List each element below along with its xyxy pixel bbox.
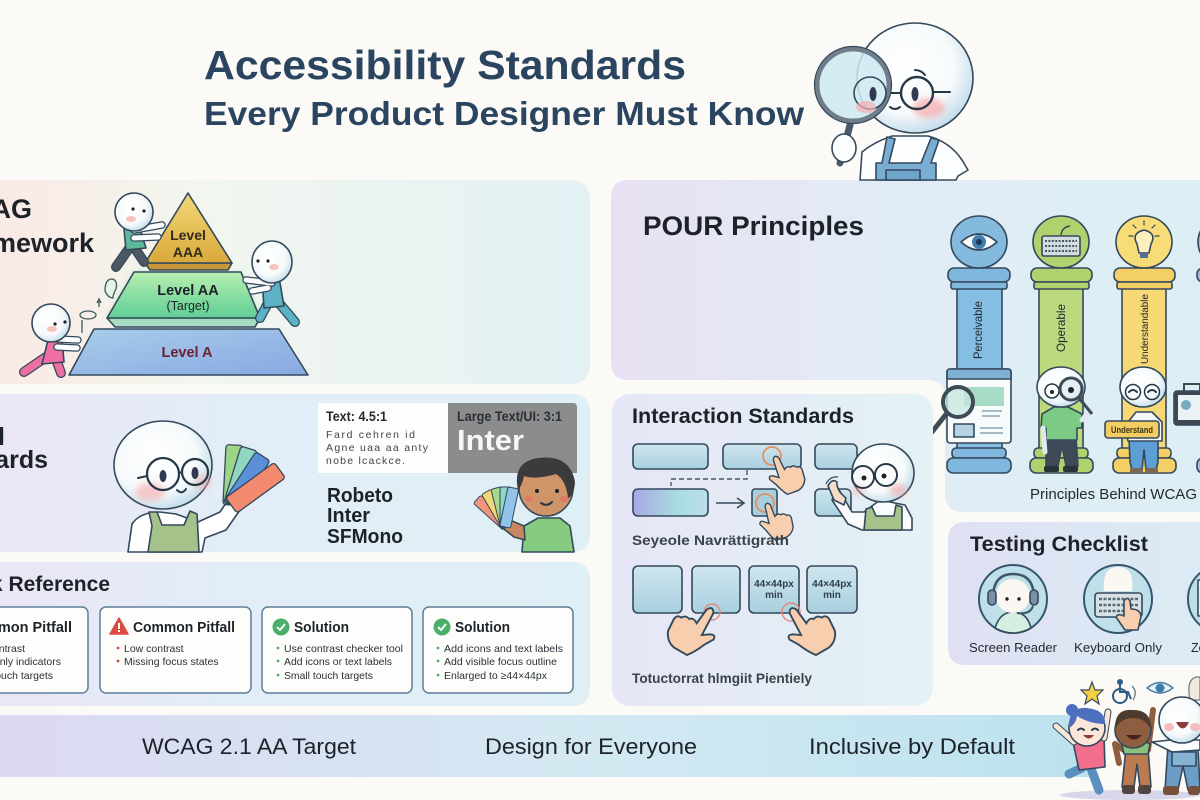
card: solution focus: Add visible focus outline (444, 656, 557, 668)
character: designer with palette fan (114, 421, 285, 552)
celebrating group (1056, 677, 1200, 800)
touch target label: 44×44px (754, 579, 794, 590)
label: Keyboard Only: Keyboard Only (1074, 641, 1163, 655)
label: Level AA Target: (Target) (166, 299, 210, 313)
caption: touch targets: Totuctorrat hlmgiit Pientiely (632, 670, 812, 686)
message: WCAG target: WCAG 2.1 AA Target (142, 734, 356, 759)
card: solution focus: Enlarged to ≥44×44px (444, 670, 548, 682)
card: solution tools: Add icons or text labels (284, 656, 392, 668)
label: Screen Reader: Screen Reader (969, 641, 1057, 655)
message: inclusive by default: Inclusive by Default (809, 734, 1015, 759)
touch target label (754, 579, 794, 601)
touch target label (812, 579, 852, 601)
icon: wheelchair (1113, 680, 1135, 703)
icon: ear and small accessibility marks (80, 279, 116, 333)
label: Level AAA (170, 227, 206, 260)
icon: palette swatch fan (223, 445, 285, 513)
keyboard navigation diagram (633, 444, 857, 543)
character: sign holder (1105, 367, 1166, 473)
character: climber teal (115, 193, 162, 267)
icon: magnifying glass (814, 46, 892, 163)
card: common pitfall: Low contrast (124, 643, 184, 655)
contrast sample card (318, 403, 577, 473)
card: solution focus (423, 607, 573, 693)
icon: screen reader (979, 565, 1047, 633)
pillar label: Perceivable (971, 301, 985, 359)
sign: Understand (1111, 425, 1153, 435)
pillar: Perceivable (947, 216, 1011, 473)
magnifier mascot (814, 23, 973, 180)
icon: keyboard only (1084, 565, 1152, 633)
character: guide pointing (826, 444, 914, 530)
icon: browser window with magnifier (932, 369, 1011, 443)
kid: mascot overalls blue (1152, 697, 1200, 795)
icon: warning triangle (110, 618, 128, 634)
touch target diagram (633, 566, 857, 663)
card: common pitfall: Common Pitfall (133, 620, 235, 636)
card: common pitfall: Missing focus states (124, 656, 219, 668)
sample paragraph: Fard cehren id (326, 429, 415, 441)
label: Level AAA: AAA (173, 244, 203, 260)
footer band (0, 715, 1090, 777)
heading: WCAG Framework (0, 194, 95, 258)
sample paragraph (326, 429, 429, 467)
title (204, 42, 804, 132)
label: Level AA Target: Level AA (157, 283, 219, 299)
card: solution tools (262, 607, 412, 693)
sample paragraph: Agne uaa aa anty (326, 442, 429, 454)
icon: zoom (1188, 565, 1200, 633)
label: Level A: Level A (161, 345, 213, 361)
label: Level AA Target (157, 283, 219, 313)
panel: testing checklist (948, 522, 1200, 665)
icon: keyboard (1042, 226, 1080, 256)
title: Accessibility Standards (204, 42, 686, 88)
panel: WCAG framework (0, 180, 590, 384)
icon: tablet (1174, 384, 1200, 425)
panel: quick reference (0, 562, 590, 706)
font list: Inter (327, 505, 370, 527)
heading: Visual Standards (0, 423, 48, 474)
sample paragraph: nobe lcackce. (326, 455, 405, 467)
card: common pitfall left (0, 607, 88, 693)
character: tester with magnifier (1037, 367, 1092, 472)
font list (327, 485, 403, 548)
pillar label: Understandable (1139, 294, 1151, 364)
panel: POUR principles (611, 180, 1200, 512)
panel: interaction standards (612, 394, 933, 706)
title: Every Product Designer Must Know (204, 95, 804, 132)
icon: tapping hand (776, 595, 841, 663)
icon: ear (1189, 677, 1200, 700)
caption: navigation: Seyeole Navrättigrath (632, 532, 789, 548)
panel: visual standards (0, 394, 590, 552)
icon: eye (1147, 682, 1173, 693)
pillar label: Operable (1054, 304, 1068, 352)
font list: SFMono (327, 526, 403, 548)
message: design for everyone: Design for Everyone (485, 734, 697, 759)
character: pusher teal-blue (246, 241, 295, 322)
card: solution tools: Solution (294, 620, 349, 636)
label: Level AAA: Level (170, 227, 206, 243)
kid: blue hair pink shirt (1056, 704, 1108, 790)
character: crawling pink (24, 304, 78, 373)
pillar: Robust (cropped) (1197, 216, 1200, 473)
heading: Testing Checklist: Testing Checklist (970, 533, 1148, 556)
card: solution tools: Use contrast checker tool (284, 643, 403, 655)
kid: overalls brown (1115, 710, 1153, 794)
character: child with swatches (473, 458, 575, 552)
arrow (716, 498, 744, 508)
icon: star (1081, 682, 1103, 704)
icon: pointing hand (763, 449, 808, 498)
icon: check circle (272, 618, 290, 636)
touch target label: 44×44px (812, 579, 852, 590)
touch target label: min (765, 590, 783, 601)
touch target label: min (823, 590, 841, 601)
card: solution focus: Add icons and text labels (444, 643, 563, 655)
heading: POUR Principles: POUR Principles (643, 211, 864, 241)
icon: check circle (434, 618, 450, 636)
icon: light bulb (1129, 221, 1159, 258)
card: solution focus: Solution (455, 620, 510, 636)
pyramid chart (69, 193, 308, 375)
label: text contrast ratio: Text: 4.5:1 (326, 409, 387, 424)
font list: Robeto (327, 485, 393, 507)
label: large text contrast ratio: Large Text/UI: 3:1 (457, 409, 562, 424)
pillar: Understandable (1113, 216, 1176, 473)
icon: pointing hand (755, 498, 796, 543)
pillar: Operable (1030, 216, 1093, 473)
icon: eye (961, 234, 997, 250)
sample large text: Inter (457, 425, 524, 457)
heading: Interaction Standards: Interaction Standards (632, 405, 854, 428)
card: solution tools: Small touch targets (284, 670, 373, 682)
caption: Principles Behind WCAG: Principles Behind WCAG (1030, 487, 1197, 503)
card: common pitfall (100, 607, 251, 693)
icon: tapping hand (662, 595, 727, 663)
